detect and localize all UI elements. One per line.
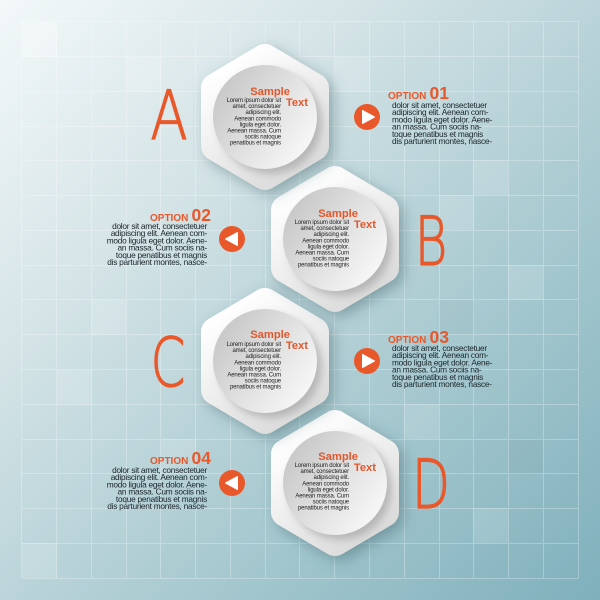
- option 02 block: [107, 205, 211, 267]
- panel: hexagon C: Aenean commodo: [234, 360, 282, 366]
- option 01 block: [388, 83, 493, 146]
- panel: hexagon D: Aenean commodo: [302, 481, 350, 487]
- option 04 block: [107, 448, 211, 511]
- option 03 block: modo ligula eget dolor. Aene-: [392, 357, 493, 367]
- option 02 block: toque penatibus et magnis: [116, 250, 207, 260]
- option 01 block: adipiscing elit. Aenean com-: [392, 107, 489, 117]
- panel: hexagon D: amet, consectetuer: [300, 469, 349, 475]
- panel: hexagon B: amet, consectetuer: [300, 226, 349, 232]
- panel: hexagon D: Text: [354, 462, 376, 474]
- panel: hexagon B: penatibus et magnis: [298, 263, 349, 269]
- panel: hexagon A: Aenean commodo: [234, 116, 282, 122]
- panel: hexagon B: ligula eget dolor.: [308, 244, 349, 250]
- panel: hexagon C: ligula eget dolor.: [240, 366, 281, 372]
- icon: left arrow 02: [219, 226, 245, 252]
- option 03 block: dolor sit amet, consectetuer: [392, 343, 487, 353]
- panel: hexagon D: Lorem ipsum dolor sit: [295, 463, 349, 469]
- option 01 block: dis parturient montes, nasce-: [392, 136, 492, 146]
- panel: hexagon B: Sample: [318, 208, 358, 220]
- panel: hexagon A: penatibus et magnis: [230, 141, 281, 147]
- panel: hexagon C: Aenean massa. Cum: [227, 372, 281, 378]
- option 01 block: toque penatibus et magnis: [392, 129, 483, 139]
- panel: hexagon B: Aenean commodo: [302, 238, 350, 244]
- panel: hexagon B: Lorem ipsum dolor sit: [295, 220, 349, 226]
- panel: hexagon A: adipiscing elit.: [246, 110, 281, 116]
- panel: hexagon A: Lorem ipsum dolor sit: [227, 98, 281, 104]
- panel: hexagon A: Sample: [250, 86, 290, 98]
- panel: hexagon B: sociis natoque: [313, 257, 350, 263]
- panel: hexagon D: penatibus et magnis: [298, 506, 349, 512]
- option 04 block: toque penatibus et magnis: [116, 494, 207, 504]
- panel: hexagon A: [213, 59, 322, 180]
- option 01 block: dolor sit amet, consectetuer: [392, 100, 487, 110]
- panel: hexagon B: [283, 181, 392, 302]
- panel: hexagon A: sociis natoque: [245, 135, 282, 141]
- panel: hexagon C: amet, consectetuer: [232, 348, 281, 354]
- letter C: C: [151, 324, 185, 403]
- panel: hexagon C: [213, 303, 322, 424]
- option 03 block: adipiscing elit. Aenean com-: [392, 350, 489, 360]
- option 04 block: 04: [192, 448, 211, 468]
- panel: hexagon C: sociis natoque: [245, 379, 282, 385]
- icon: left arrow 04: [219, 470, 245, 496]
- letter A: A: [150, 76, 188, 156]
- option 02 block: dolor sit amet, consectetuer: [112, 221, 207, 231]
- option 03 block: [388, 327, 493, 389]
- panel: hexagon B: Text: [354, 219, 376, 231]
- option 03 block: 03: [430, 327, 449, 347]
- panel: hexagon D: ligula eget dolor.: [308, 487, 349, 493]
- option 04 block: an massa. Cum sociis na-: [118, 487, 207, 497]
- panel: hexagon D: [283, 425, 392, 546]
- option 04 block: adipiscing elit. Aenean com-: [111, 472, 207, 482]
- panel: hexagon D: sociis natoque: [313, 500, 350, 506]
- icon: right arrow 01: [354, 104, 380, 130]
- option 04 block: dis parturient montes, nasce-: [107, 501, 207, 511]
- panel: hexagon D: Aenean massa. Cum: [295, 494, 349, 500]
- option 02 block: 02: [192, 205, 211, 225]
- letter B: B: [415, 203, 447, 282]
- option 03 block: toque penatibus et magnis: [392, 372, 483, 382]
- option 02 block: dis parturient montes, nasce-: [107, 257, 207, 267]
- option 02 block: OPTION: [150, 213, 188, 224]
- panel: hexagon D: Sample: [318, 451, 358, 463]
- panel: hexagon A: Aenean massa. Cum: [227, 128, 281, 134]
- option 01 block: modo ligula eget dolor. Aene-: [392, 114, 493, 124]
- panel: hexagon C: Sample: [250, 329, 290, 341]
- icon: right arrow 03: [354, 348, 380, 374]
- option 03 block: an massa. Cum sociis na-: [392, 365, 482, 375]
- panel: hexagon C: Text: [286, 340, 308, 352]
- panel: hexagon C: penatibus et magnis: [230, 385, 281, 391]
- panel: hexagon B: Aenean massa. Cum: [295, 250, 349, 256]
- option 04 block: OPTION: [150, 456, 188, 467]
- panel: hexagon C: adipiscing elit.: [246, 354, 281, 360]
- option 01 block: an massa. Cum sociis na-: [392, 122, 482, 132]
- panel: hexagon A: Text: [286, 97, 308, 109]
- panel: hexagon A: ligula eget dolor.: [240, 122, 281, 128]
- option 03 block: dis parturient montes, nasce-: [392, 379, 492, 389]
- option 02 block: an massa. Cum sociis na-: [118, 243, 207, 253]
- panel: hexagon A: amet, consectetuer: [232, 104, 281, 110]
- option 02 block: adipiscing elit. Aenean com-: [111, 228, 207, 238]
- option 02 block: modo ligula eget dolor. Aene-: [107, 235, 207, 245]
- letter D: D: [412, 445, 450, 524]
- option 03 block: OPTION: [388, 335, 426, 346]
- option 04 block: dolor sit amet, consectetuer: [112, 465, 207, 475]
- option 01 block: OPTION: [388, 91, 426, 102]
- panel: hexagon B: adipiscing elit.: [314, 232, 349, 238]
- panel: hexagon C: Lorem ipsum dolor sit: [227, 342, 281, 348]
- option 04 block: modo ligula eget dolor. Aene-: [107, 479, 207, 489]
- panel: hexagon D: adipiscing elit.: [314, 475, 349, 481]
- option 01 block: 01: [430, 83, 449, 103]
